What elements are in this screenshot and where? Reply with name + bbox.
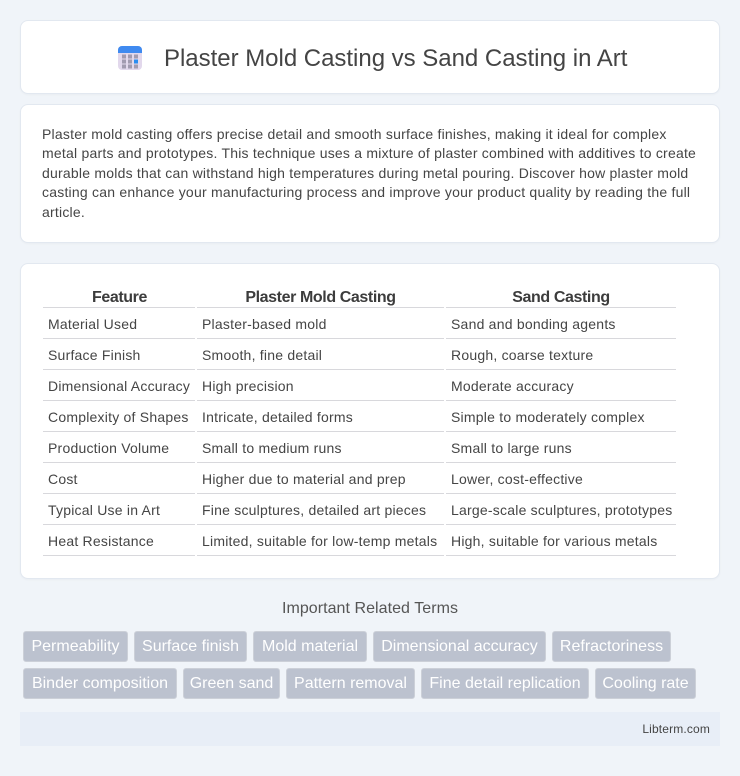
row: surface finish: Surface Finish (48, 347, 141, 363)
row: complexity of shapes: Simple to moderately complex (451, 409, 645, 425)
row: cost: Higher due to material and prep (202, 471, 406, 487)
intro text panel (20, 104, 720, 243)
row: typical use in art: Large-scale sculptures, prototypes (451, 502, 672, 518)
row: material used: Plaster-based mold (202, 316, 327, 332)
related terms tags row 1: Dimensional accuracy (381, 638, 538, 655)
related terms tags row 2: Cooling rate (602, 675, 689, 692)
row: complexity of shapes: Complexity of Shapes (48, 409, 189, 425)
related terms heading: Important Related Terms (282, 600, 458, 617)
row: material used: Material Used (48, 316, 137, 332)
row: cost: Cost (48, 471, 78, 487)
related terms tags row 1: Mold material (262, 638, 358, 655)
comparison table panel (20, 263, 720, 579)
row: surface finish: Smooth, fine detail (202, 347, 322, 363)
table header row (92, 288, 610, 306)
related terms tags row 1: Refractoriness (560, 638, 663, 655)
row: heat resistance: High, suitable for various metals (451, 533, 657, 549)
intro paragraph (42, 126, 696, 220)
table header row: Feature (92, 288, 147, 306)
intro paragraph: casting can enhance your manufacturing process and improve your product quality by reading the full (42, 184, 690, 200)
row: heat resistance (48, 533, 657, 549)
related terms tags row 1: Surface finish (142, 638, 239, 655)
intro paragraph: durable molds that can withstand high temperatures during metal pouring. Discover how plaster mold (42, 165, 688, 181)
row: cost: Lower, cost-effective (451, 471, 583, 487)
row: production volume (48, 440, 572, 456)
related terms tags row 2: Pattern removal (294, 675, 407, 692)
row: production volume: Production Volume (48, 440, 169, 456)
footer bar (20, 712, 720, 746)
row: dimensional accuracy: Dimensional Accuracy (48, 378, 190, 394)
row: material used: Sand and bonding agents (451, 316, 616, 332)
row: production volume: Small to medium runs (202, 440, 342, 456)
related terms tags row 2: Fine detail replication (429, 675, 581, 692)
header panel (20, 20, 720, 94)
intro paragraph: metal parts and prototypes. This technique uses a mixture of plaster combined with additives to create (42, 145, 696, 161)
table header row: Sand Casting (512, 288, 610, 306)
row: complexity of shapes: Intricate, detailed forms (202, 409, 353, 425)
related terms tags row 2 (23, 668, 696, 699)
row: material used (48, 316, 616, 332)
row: production volume: Small to large runs (451, 440, 572, 456)
intro paragraph: Plaster mold casting offers precise detail and smooth surface finishes, making it ideal for complex (42, 126, 667, 142)
row: surface finish (48, 347, 593, 363)
related terms tags row 1 (23, 631, 671, 662)
table header row: Plaster Mold Casting (245, 288, 396, 306)
footer credit: Libterm.com (642, 722, 710, 736)
row: dimensional accuracy: High precision (202, 378, 294, 394)
row: heat resistance: Heat Resistance (48, 533, 154, 549)
icon: calendar grid (118, 46, 142, 70)
row: typical use in art: Typical Use in Art (48, 502, 160, 518)
row: heat resistance: Limited, suitable for low-temp metals (202, 533, 437, 549)
row: typical use in art: Fine sculptures, detailed art pieces (202, 502, 426, 518)
row: typical use in art (48, 502, 672, 518)
related terms tags row 2: Green sand (190, 675, 273, 692)
row: cost (48, 471, 583, 487)
row: dimensional accuracy (48, 378, 574, 394)
title: Plaster Mold Casting vs Sand Casting in Art (164, 45, 627, 72)
related terms tags row 1: Permeability (31, 638, 120, 655)
related terms tags row 2: Binder composition (32, 675, 168, 692)
row: surface finish: Rough, coarse texture (451, 347, 593, 363)
row: complexity of shapes (48, 409, 645, 425)
intro paragraph: article. (42, 204, 85, 220)
row: dimensional accuracy: Moderate accuracy (451, 378, 574, 394)
